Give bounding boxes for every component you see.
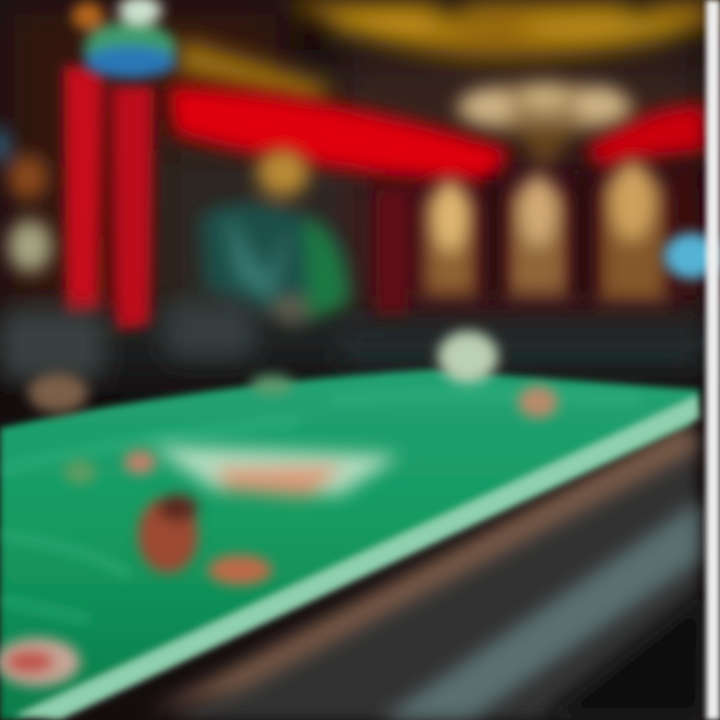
- light table edge: [14, 395, 700, 720]
- arched windows: [424, 160, 666, 300]
- top-left colored sign: [72, 0, 176, 78]
- red curtains left: [64, 66, 154, 330]
- chandelier: [455, 82, 635, 165]
- ceiling: gold: [175, 0, 710, 105]
- seats behind table: [0, 300, 700, 380]
- cyan light: [664, 233, 720, 279]
- table cards: [150, 445, 400, 497]
- wall tones: [0, 0, 720, 370]
- dark columns: [376, 165, 696, 315]
- right white edge: [706, 0, 720, 720]
- table underside: [170, 430, 700, 720]
- dark floor corner: [540, 590, 705, 720]
- red curtain band: [168, 86, 706, 180]
- grey-teal lower rail: [380, 500, 700, 720]
- felt lines: [0, 395, 640, 620]
- green figure: [200, 148, 350, 325]
- left wall lights: [0, 127, 52, 272]
- wooden rail: [150, 422, 698, 712]
- casino table felt: [0, 370, 700, 720]
- chips on table: [0, 331, 558, 686]
